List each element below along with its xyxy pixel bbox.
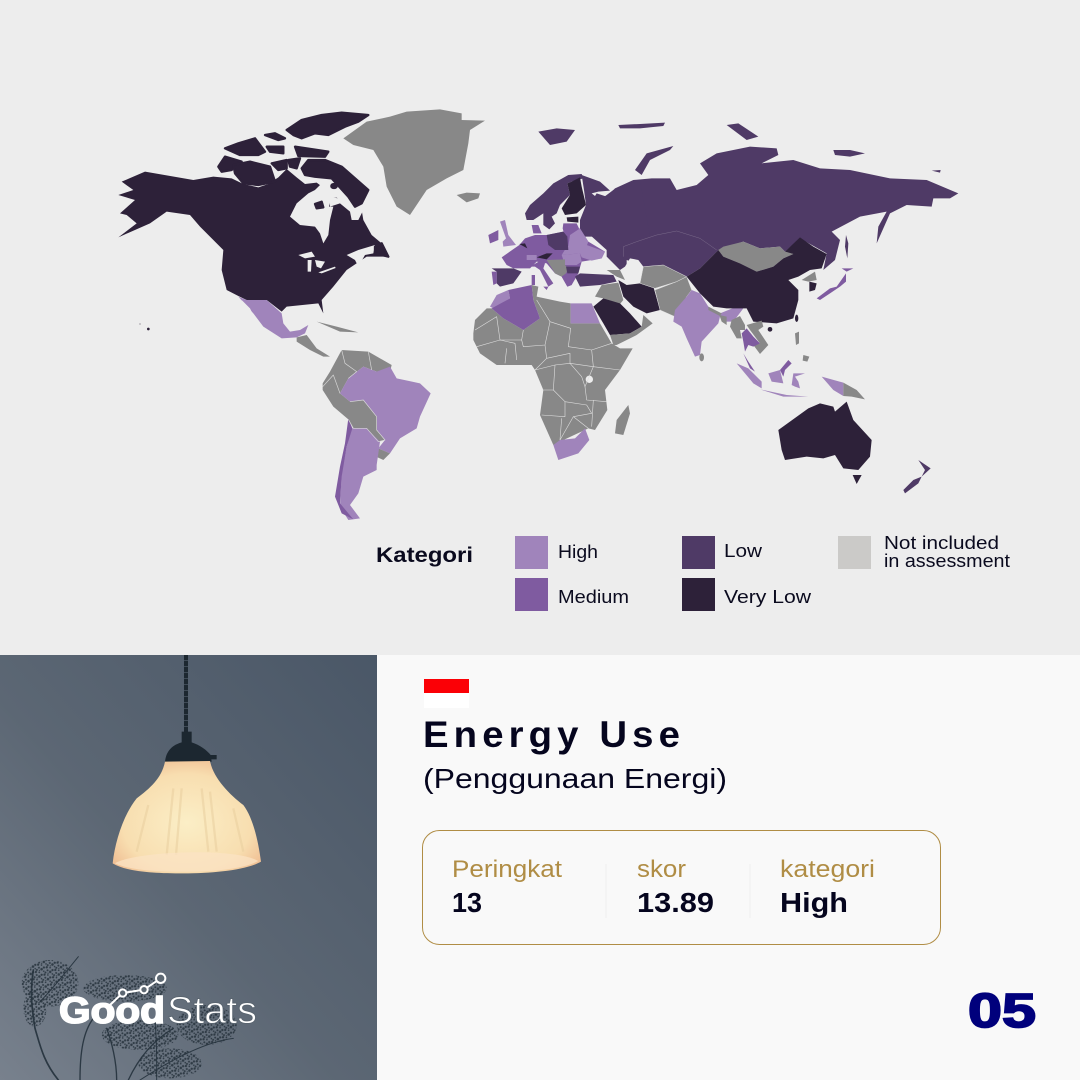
stat: kategori: High (780, 887, 848, 918)
China and Mongolia (687, 237, 827, 332)
African country borders (475, 300, 620, 440)
map: Europe (488, 174, 650, 290)
Central America and Caribbean (297, 322, 358, 357)
stat: Peringkat: Peringkat (452, 856, 562, 883)
legend (376, 533, 1010, 611)
page number: 05 (968, 985, 1036, 1038)
legend: Not included (838, 533, 1010, 571)
East and Southeast Asia (730, 235, 865, 399)
Middle East (593, 270, 660, 345)
lamp socket (165, 732, 217, 762)
plant (22, 957, 237, 1080)
Arctic islands (218, 113, 388, 257)
continental Europe underlay (502, 228, 605, 287)
lamp shade (113, 761, 261, 873)
Finland (562, 177, 586, 215)
Central Asia (640, 265, 692, 317)
stat: skor (637, 856, 714, 918)
lamp cable (180, 655, 192, 732)
map: Eastern Hemisphere (473, 123, 958, 493)
Russia and Kazakhstan (538, 123, 958, 277)
legend title: Kategori (376, 543, 473, 567)
legend: Very Low (682, 578, 812, 611)
stat: Peringkat (452, 856, 562, 918)
legend: Low: Low (724, 541, 763, 561)
subheading: (Penggunaan Energi) (423, 763, 727, 794)
India (673, 290, 743, 357)
Canadian Arctic detail (218, 113, 388, 273)
logo wordmark: Good (59, 990, 165, 1031)
Norway and Sweden (525, 174, 583, 229)
Gulf of California (242, 300, 257, 322)
stats card (422, 830, 940, 944)
Africa (473, 285, 633, 460)
Australia and New Zealand (778, 402, 931, 493)
map panel background (0, 0, 1080, 655)
info panel background (377, 655, 1080, 1080)
logo: GoodStats: Stats (167, 990, 257, 1032)
logo icon: trend line (110, 974, 165, 1005)
legend: Medium (515, 578, 629, 611)
stat: kategori: kategori (780, 856, 875, 883)
stat: skor: 13.89 (637, 887, 714, 918)
photo: pendant lamp (0, 655, 377, 1080)
flag: Indonesia (424, 679, 469, 708)
legend: Low (682, 536, 763, 569)
northwest Russia (580, 175, 650, 237)
legend: Not included: Not included (884, 533, 999, 553)
legend: Medium: Medium (558, 587, 629, 607)
legend: High (515, 536, 598, 569)
Hawaii (139, 323, 150, 330)
Caspian Sea (627, 260, 638, 285)
European countries (488, 217, 617, 290)
South America (323, 350, 431, 520)
Greenland and Iceland (343, 109, 485, 215)
stat: skor: skor (637, 856, 686, 883)
logo: GoodStats (59, 974, 257, 1032)
Mexico (238, 297, 308, 338)
foliage (22, 960, 237, 1078)
South Asia small countries (699, 307, 727, 361)
stat: kategori (780, 856, 875, 918)
legend: Not included: in assessment (884, 551, 1010, 571)
world map (118, 109, 958, 520)
United States and mainland Canada (118, 169, 388, 313)
shade ribs (137, 788, 243, 855)
map: Americas (118, 109, 485, 520)
heading: Energy Use (423, 713, 685, 755)
legend: High: High (558, 542, 598, 562)
legend: Very Low: Very Low (724, 587, 812, 607)
shade rim (115, 852, 258, 872)
Hudson Bay, straits and lakes (290, 180, 375, 273)
stat: Peringkat: 13 (452, 887, 482, 918)
